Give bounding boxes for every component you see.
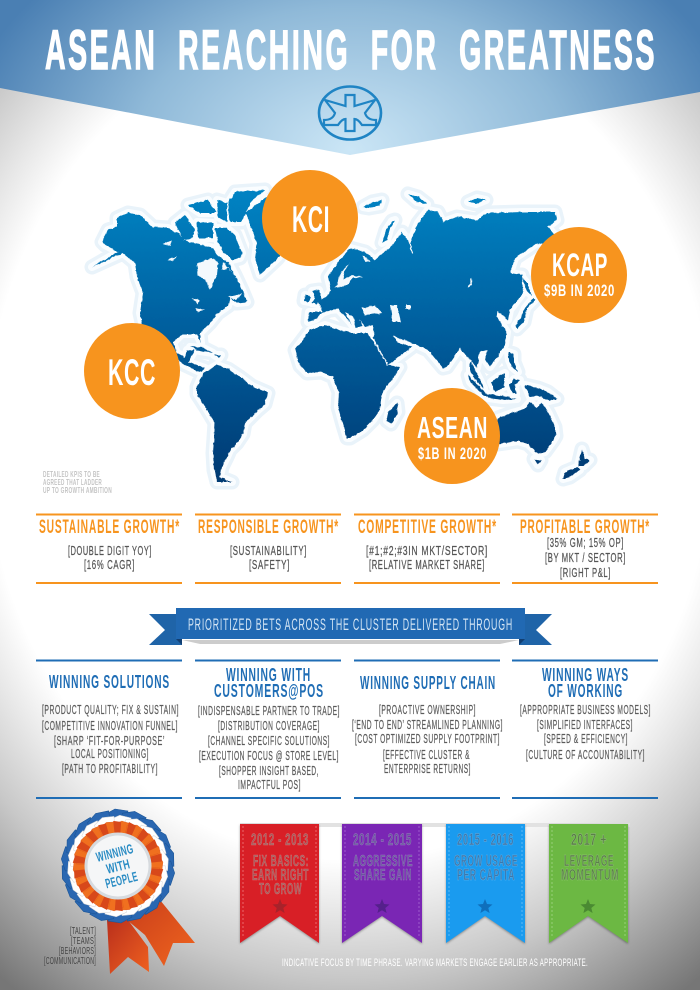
- star: [478, 899, 492, 913]
- panel: competitive growth: COMPETITIVE GROWTH*: [358, 517, 497, 538]
- rosette: winning with people: PEOPLE: [104, 869, 139, 891]
- panel: winning solutions: [COMPETITIVE INNOVATION FUNNEL]: [42, 719, 178, 733]
- logo: [319, 86, 381, 140]
- circle: ASEAN: ASEAN: [417, 410, 488, 445]
- panel: winning with customers: [CHANNEL SPECIFIC SOLUTIONS]: [208, 734, 330, 748]
- panel: responsible growth: RESPONSIBLE GROWTH*: [198, 517, 339, 538]
- ribbon: 2017+: [549, 824, 628, 943]
- panel: winning supply chain: [352, 660, 503, 798]
- panel: sustainable growth: [16% CAGR]: [84, 558, 135, 572]
- ribbon: 2015-2016: GROW USAGE: [454, 853, 518, 870]
- panel: winning supply chain: [‘END TO END’ STREAMLINED PLANNING]: [352, 718, 503, 732]
- KPI footnote: UP TO GROWTH AMBITION: [43, 485, 112, 495]
- panel: winning solutions: [PRODUCT QUALITY; FIX & SUSTAIN]: [42, 703, 179, 717]
- ribbon: 2015-2016: PER CAPITA: [457, 867, 515, 884]
- panel: profitable growth: [512, 514, 658, 583]
- people list: [44, 926, 96, 967]
- panel: winning with customers: [EXECUTION FOCUS @ STORE LEVEL]: [199, 749, 339, 763]
- panel: winning solutions: [SHARP ‘FIT-FOR-PURPOSE’: [54, 734, 165, 748]
- KPI footnote: DETAILED KPIS TO BE: [43, 469, 100, 479]
- star: [272, 899, 288, 913]
- panel: winning supply chain: ENTERPRISE RETURNS]: [384, 762, 471, 776]
- people list: [TEAMS]: [71, 936, 96, 947]
- ribbon: 2012-2013: 2012 - 2013: [251, 830, 309, 849]
- panel: competitive growth: [354, 514, 500, 583]
- circle: ASEAN: $1B IN 2020: [418, 444, 487, 463]
- header banner with title and logo: [0, 0, 700, 155]
- ribbon: 2012-2013: TO GROW: [259, 881, 302, 898]
- panel: winning solutions: WINNING SOLUTIONS: [49, 671, 170, 692]
- people list: [BEHAVIORS]: [59, 946, 96, 957]
- circle: KCC: KCC: [108, 352, 156, 393]
- people list: [TALENT]: [70, 926, 96, 937]
- ribbon: 2012-2013: [240, 824, 319, 943]
- panel: responsible growth: [SAFETY]: [249, 558, 290, 572]
- panel: winning supply chain: [COST OPTIMIZED SUPPLY FOOTPRINT]: [355, 732, 500, 746]
- circle: KCC: [84, 323, 180, 419]
- panel: winning ways of working: [512, 660, 658, 798]
- panel: competitive growth: [RELATIVE MARKET SHARE]: [369, 558, 485, 572]
- ribbon: 2017+: MOMENTUM: [561, 867, 619, 884]
- panel: profitable growth: [35% GM; 15% OP]: [547, 536, 624, 550]
- panel: sustainable growth: [DOUBLE DIGIT YOY]: [68, 544, 152, 558]
- ribbon: 2017+: 2017 +: [571, 830, 607, 849]
- panel: winning ways of working: WINNING WAYS: [542, 664, 629, 685]
- ribbon: 2015-2016: 2015 - 2016: [457, 830, 514, 849]
- circle: KCAP: $9B IN 2020: [544, 281, 615, 300]
- ribbon: 2014-2015: SHARE GAIN: [354, 867, 412, 884]
- ribbon: 2014-2015: 2014 - 2015: [353, 830, 412, 849]
- ribbon: 2012-2013: FIX BASICS:: [253, 853, 309, 870]
- panel: winning with customers: CUSTOMERS@POS: [214, 680, 324, 701]
- rosette: winning with people: WITH: [105, 856, 132, 877]
- panel: winning ways of working: OF WORKING: [548, 680, 623, 701]
- panel: responsible growth: [195, 514, 341, 583]
- KPI footnote: [43, 469, 112, 495]
- panel: winning solutions: LOCAL POSITIONING]: [71, 747, 149, 761]
- star: [374, 899, 390, 913]
- panel: winning with customers: [195, 660, 341, 798]
- panel: competitive growth: [#1;#2;#3IN MKT/SECTOR]: [366, 544, 488, 558]
- panel: winning solutions: [36, 660, 182, 798]
- circle: KCAP: KCAP: [552, 247, 608, 283]
- panel: sustainable growth: [36, 514, 182, 583]
- circle: KCI: [262, 170, 358, 266]
- panel: winning supply chain: [PROACTIVE OWNERSHIP]: [379, 703, 476, 717]
- KPI footnote: AGREED THAT LADDER: [43, 477, 102, 487]
- ribbon: 2014-2015: [342, 824, 422, 943]
- panel: winning with customers: [INDISPENSABLE PARTNER TO TRADE]: [198, 704, 340, 718]
- people list: [COMMUNICATION]: [44, 956, 96, 967]
- panel: profitable growth: [BY MKT / SECTOR]: [545, 551, 626, 565]
- ribbon: 2012-2013: EARN RIGHT: [252, 867, 309, 884]
- rosette tails: [107, 900, 195, 974]
- panel: winning supply chain: [EFFECTIVE CLUSTER &: [383, 748, 470, 762]
- world map: [92, 190, 590, 482]
- panel: winning with customers: WINNING WITH: [226, 664, 311, 685]
- circle: KCAP: [531, 227, 627, 323]
- panel: winning with customers: [SHOPPER INSIGHT BASED,: [219, 764, 319, 778]
- star: [580, 899, 596, 913]
- lakes and inland seas: [163, 241, 410, 322]
- ribbon: 2014-2015: AGGRESSIVE: [353, 853, 413, 870]
- ribbon banner: [149, 608, 552, 645]
- panel: winning ways of working: [SPEED & EFFICIENCY]: [544, 732, 628, 746]
- panel: winning solutions: [PATH TO PROFITABILITY]: [62, 762, 158, 776]
- rosette: winning with people: [59, 808, 195, 974]
- panel: profitable growth: [RIGHT P&L]: [560, 566, 611, 580]
- panel: winning with customers: IMPACTFUL POS]: [238, 778, 301, 792]
- panel: winning supply chain: WINNING SUPPLY CHAIN: [360, 672, 496, 693]
- panel: responsible growth: [SUSTAINABILITY]: [230, 544, 307, 558]
- ribbon: 2017+: LEVERAGE: [564, 853, 614, 870]
- circle: KCI: KCI: [292, 199, 330, 240]
- panel: sustainable growth: SUSTAINABLE GROWTH*: [39, 517, 180, 538]
- ribbon: 2015-2016: [446, 824, 525, 943]
- rosette: winning with people: WINNING: [94, 841, 135, 865]
- panel: winning with customers: [DISTRIBUTION COVERAGE]: [218, 719, 320, 733]
- top shadow band: [240, 823, 630, 827]
- circle: ASEAN: [404, 388, 500, 484]
